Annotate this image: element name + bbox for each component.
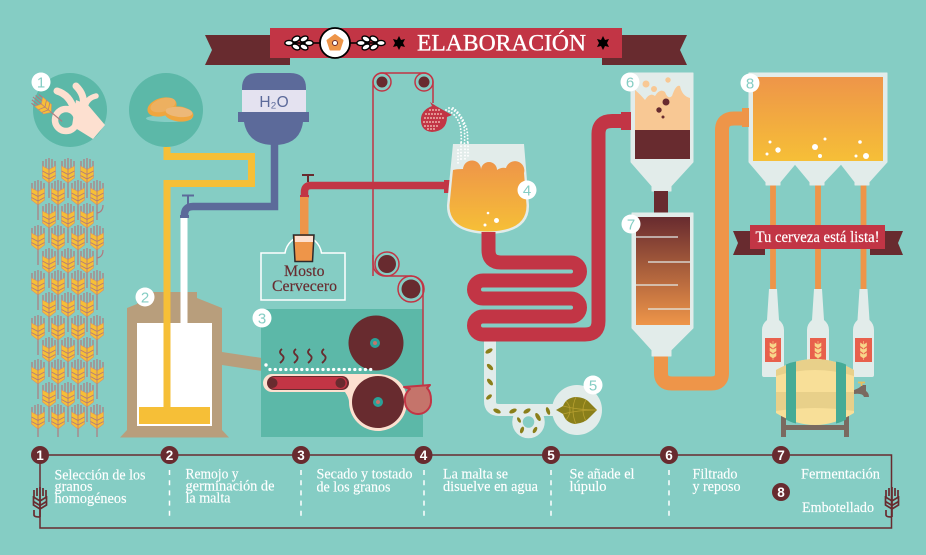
step 6 legend: y reposo — [692, 479, 740, 495]
step 6 legend: 6 — [665, 448, 673, 463]
step 5 legend: lúpulo — [570, 479, 606, 495]
step 8: storage tank — [740, 73, 887, 185]
conveyor belt — [263, 374, 407, 431]
icon: star left — [393, 36, 405, 50]
pipe joint — [621, 112, 631, 130]
step 6: filter tank — [620, 72, 693, 191]
ready banner — [733, 225, 903, 255]
step 3 legend: 3 — [297, 448, 305, 463]
step 7: fermentation tank — [622, 213, 693, 356]
step 1 legend: 1 — [36, 448, 44, 463]
step 3 legend: Secado y tostado — [316, 466, 412, 482]
connector between tanks — [654, 191, 668, 214]
wheat field — [32, 158, 104, 444]
step 1 legend: Selección de los — [54, 468, 146, 484]
step 1 legend — [31, 446, 146, 507]
icon: wheat right — [886, 487, 898, 517]
mosto cervecero box — [261, 235, 345, 300]
step 3 legend — [292, 446, 412, 496]
step 2 legend — [160, 446, 274, 506]
title banner — [205, 28, 687, 65]
number badge 2 — [136, 288, 154, 306]
yellow grain pipe — [167, 147, 252, 292]
icon: title ornament — [285, 28, 385, 58]
step 5 legend: Se añade el — [570, 466, 634, 482]
pipe joint — [742, 108, 749, 127]
grains circle — [129, 73, 203, 147]
step 7 legend: 7 — [777, 448, 785, 463]
icon: wheat in hand — [29, 92, 66, 126]
step 3: drying machine — [252, 308, 423, 437]
white water stream — [180, 218, 188, 324]
mosto label: Mosto — [284, 263, 325, 280]
orange wort stream — [300, 197, 308, 235]
red coil pipe — [474, 121, 622, 334]
icon: wort glass — [294, 235, 314, 262]
step 7 legend: Fermentación — [801, 466, 881, 482]
step 4 legend: 4 — [420, 448, 428, 463]
step 2 legend: germinación de — [186, 478, 274, 494]
red bucket — [404, 385, 431, 414]
barrel stand — [781, 413, 849, 437]
malt sieve bag and falling grains — [421, 102, 468, 162]
step 2 legend: 2 — [166, 448, 173, 463]
legend frame — [40, 455, 892, 528]
number badge 8: 8 — [746, 76, 754, 92]
number badge 6: 6 — [626, 74, 634, 92]
number badge 3 — [252, 308, 272, 328]
number badge 1: 1 — [37, 74, 45, 92]
hops pipe and seeds — [485, 341, 557, 434]
step 8 legend — [772, 483, 874, 516]
water pipe and tap — [180, 143, 274, 218]
step 7 legend — [772, 446, 881, 482]
bottles — [762, 289, 874, 377]
grain dots — [270, 368, 374, 371]
step 4 legend — [414, 446, 539, 495]
step 8 legend: Embotellado — [802, 500, 874, 516]
icon: wheat left — [34, 487, 46, 517]
barrel — [776, 359, 869, 437]
steam — [280, 349, 326, 363]
step 8 legend: 8 — [777, 485, 785, 500]
number badge 4: 4 — [523, 182, 531, 200]
step 1: hand selecting grain — [29, 72, 107, 147]
step 4 legend: La malta se — [443, 466, 508, 482]
H2O tank — [180, 73, 309, 218]
step 1 legend: granos — [54, 479, 93, 495]
icon: hop cone — [556, 397, 597, 424]
step 2: steeping vat — [120, 218, 262, 438]
step 2 legend: la malta — [186, 490, 231, 506]
step 4: mash glass — [447, 143, 536, 234]
process legend — [31, 446, 898, 528]
ready banner: Tu cerveza está lista! — [756, 229, 880, 246]
barrel tap — [854, 382, 869, 397]
step 5 legend — [542, 446, 634, 495]
orange pipe to tank 8 — [661, 118, 745, 384]
number badge 7 — [622, 214, 640, 234]
filling pipes — [773, 184, 864, 290]
step 2 legend: Remojo y — [186, 466, 239, 482]
icon: star right — [597, 36, 609, 50]
step 1 legend: homogéneos — [54, 491, 127, 507]
step 3 legend: de los granos — [316, 480, 391, 496]
step 5 legend: 5 — [547, 448, 555, 463]
bottle 2 — [807, 289, 829, 377]
upper roller — [348, 316, 404, 370]
bottle 1 — [762, 289, 784, 377]
red hot-water pipe and tap — [300, 175, 450, 198]
number badge 5: 5 — [589, 378, 597, 394]
number badge 2: 2 — [141, 290, 149, 306]
hop seeds — [485, 347, 551, 434]
step 6 legend — [660, 446, 740, 495]
icon: hand — [55, 86, 105, 139]
title text: ELABORACIÓN — [417, 30, 586, 56]
number badge 3: 3 — [258, 310, 266, 328]
bottle 3 — [853, 289, 874, 377]
number badge 7: 7 — [627, 216, 635, 234]
step 5: hop — [552, 376, 602, 435]
step 6 legend: Filtrado — [692, 466, 738, 482]
pulley cable system — [373, 73, 433, 414]
step 4 legend: disuelve en agua — [443, 479, 539, 495]
number badge 8 — [740, 74, 760, 92]
cervecero label: Cervecero — [272, 278, 337, 295]
H2O label: H₂O — [259, 94, 289, 111]
